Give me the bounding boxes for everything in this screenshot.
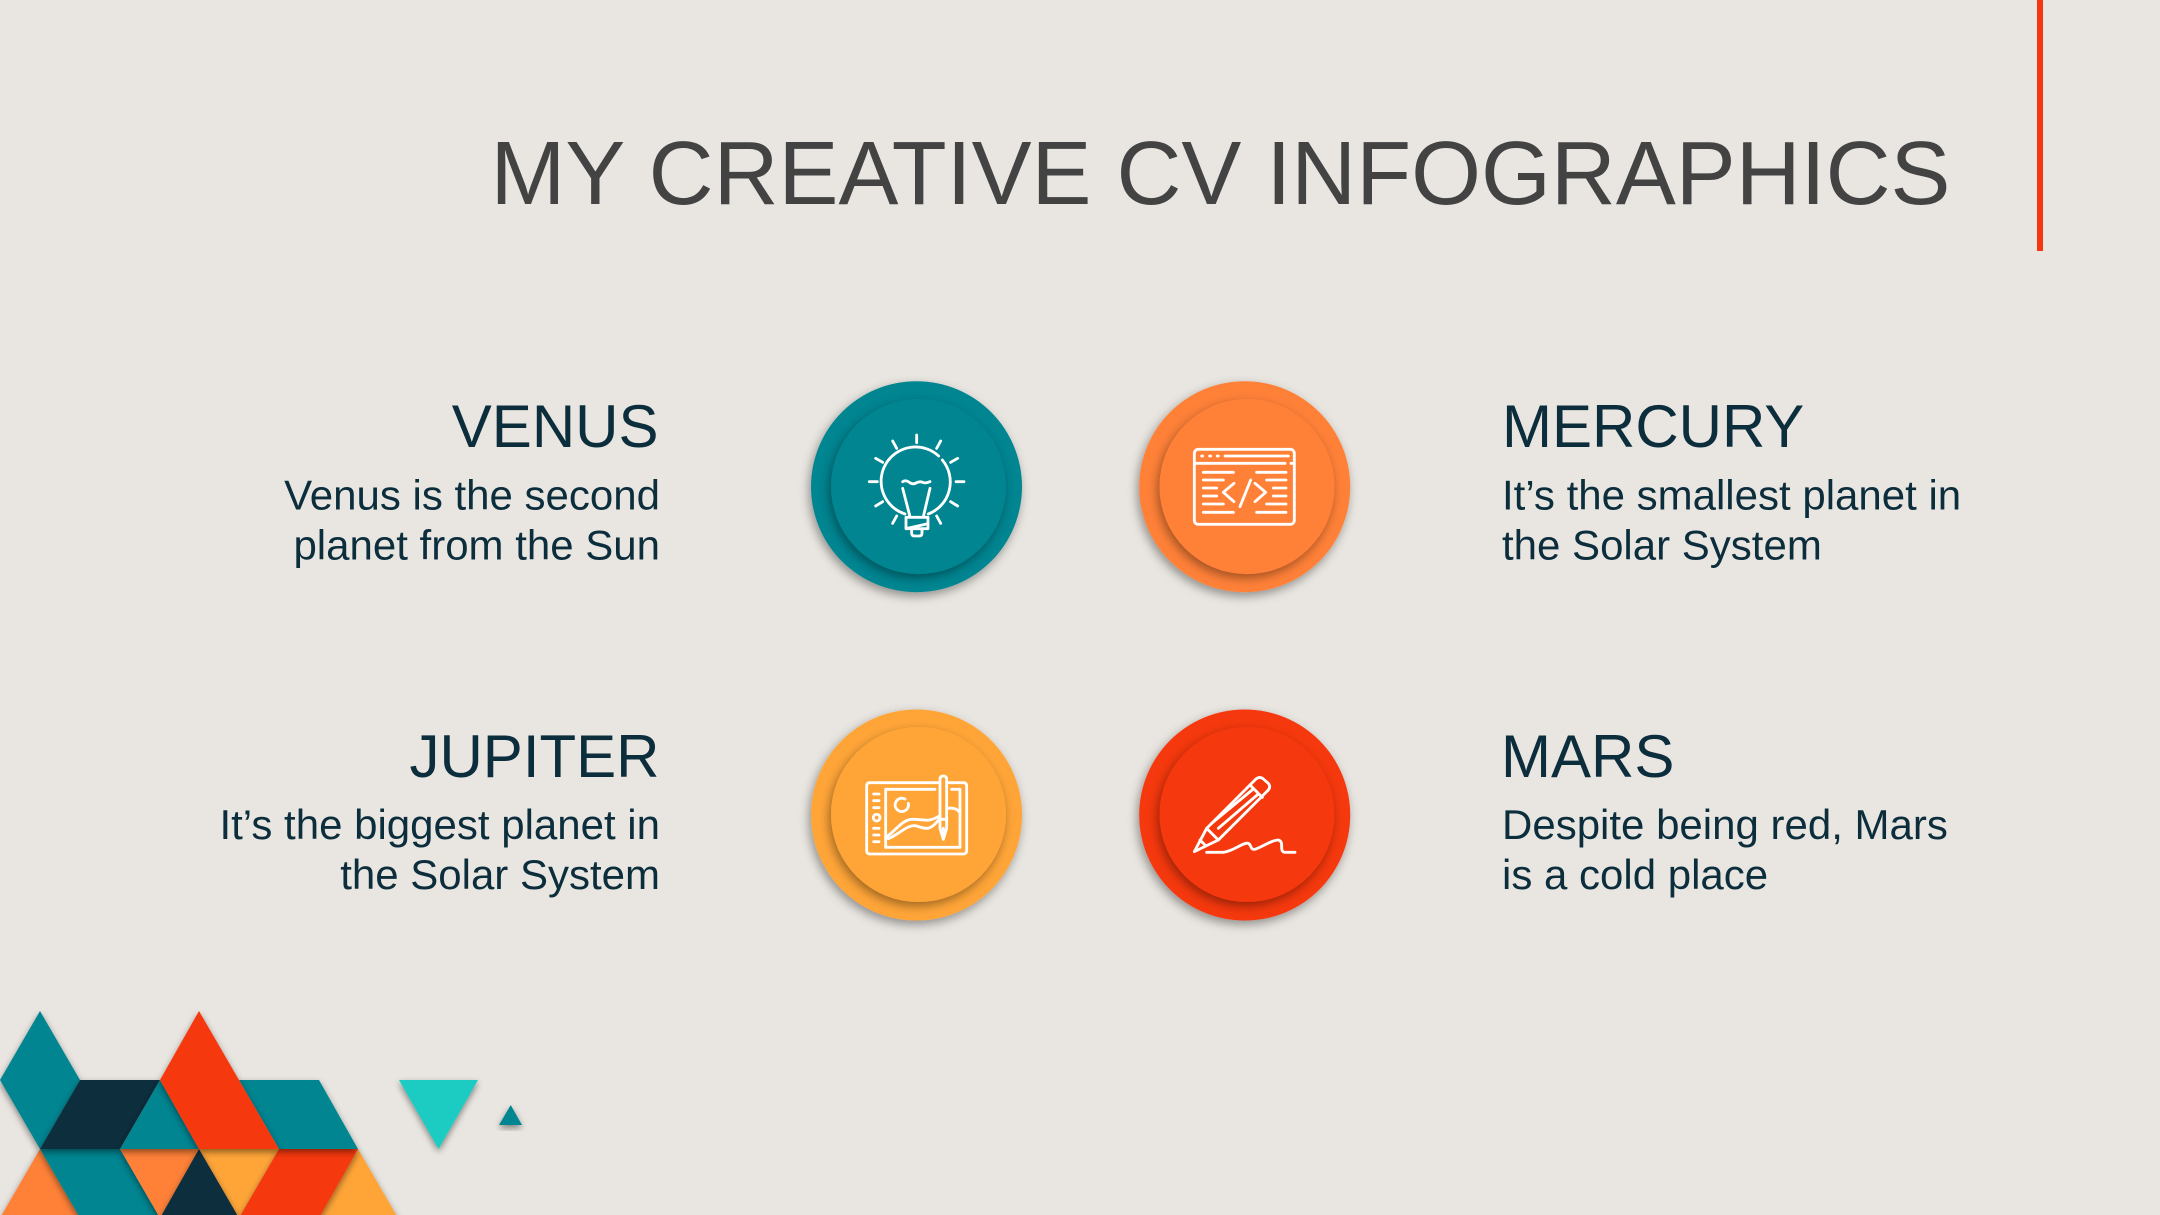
diamond: teal left [0,1011,80,1149]
parallelogram: teal right [239,1080,358,1149]
description: Mercury: It’s the smallest planet in [1502,472,1961,518]
heading: Mercury: MERCURY [1502,393,1804,460]
triangle: cyan inverted [399,1080,478,1149]
panel: Mars text [1501,723,1948,898]
description: Mercury: the Solar System [1502,522,1822,568]
heading: Venus: VENUS [452,393,658,460]
badge: Mars pencil [1139,710,1350,920]
triangle: teal upper [120,1080,199,1149]
panel: Mercury text [1502,393,1961,568]
badge: Jupiter drawing tablet [811,710,1022,920]
badge: Mercury code window [1139,381,1350,592]
panel: Venus text [284,393,660,568]
description: Mars: is a cold place [1502,851,1768,898]
triangle: yellow centre [199,1149,279,1215]
parallelogram: navy [40,1080,160,1149]
badge: Venus lightbulb [811,381,1022,592]
icon: drawing tablet [867,776,967,854]
parallelogram: red lower [239,1149,358,1215]
title: MY CREATIVE CV INFOGRAPHICS [490,124,1950,224]
parallelogram: red upper [160,1011,279,1149]
panel: Jupiter text [219,723,660,898]
parallelogram: teal lower [40,1149,160,1215]
triangle: yellow right [319,1149,398,1215]
description: Venus: Venus is the second [284,472,660,518]
heading: Jupiter: JUPITER [409,723,660,790]
icon: lightbulb [869,435,964,536]
description: Jupiter: It’s the biggest planet in [219,801,660,848]
icon: code window [1194,449,1294,524]
description: Venus: planet from the Sun [293,522,660,568]
description: Jupiter: the Solar System [340,851,660,898]
icon: pencil and signature [1194,777,1295,852]
triangle: navy centre [160,1149,239,1215]
triangle: orange left [0,1149,80,1215]
accent bar [2037,0,2043,251]
triangle: orange centre [120,1149,199,1215]
description: Mars: Despite being red, Mars [1502,801,1948,848]
heading: Mars: MARS [1501,723,1674,790]
triangle: small teal [499,1105,522,1125]
decoration: triangle mosaic [0,1011,398,1215]
